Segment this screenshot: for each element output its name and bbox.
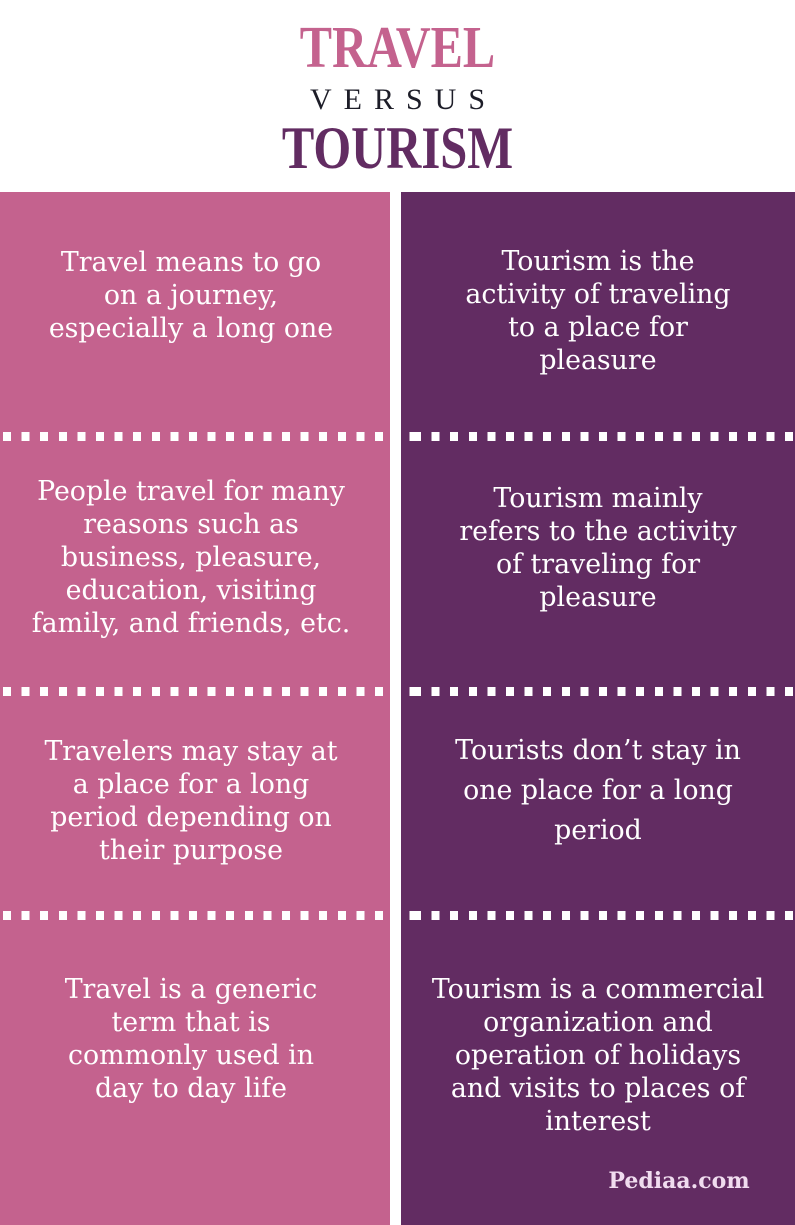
text: tourism row 4: and visits to places of	[451, 1073, 745, 1104]
text: travel row 2	[32, 476, 350, 639]
panel: tourism column	[401, 192, 795, 1225]
text: tourism row 3: Tourists don’t stay in	[455, 735, 741, 766]
logo: pediaa: Pediaa.com	[608, 1168, 750, 1194]
text: tourism row 4: organization and	[483, 1007, 713, 1038]
title: versus: VERSUS	[310, 83, 497, 116]
text: tourism row 4	[432, 974, 764, 1137]
text: travel row 2: education, visiting	[66, 575, 316, 606]
text: travel row 1	[49, 247, 333, 344]
title: travel: TRAVEL	[300, 14, 495, 80]
text: tourism row 1	[465, 246, 731, 376]
text: travel row 4: Travel is a generic	[65, 974, 317, 1005]
text: travel row 3: Travelers may stay at	[44, 736, 338, 767]
text: travel row 2: business, pleasure,	[61, 542, 321, 573]
text: tourism row 4: operation of holidays	[455, 1040, 741, 1071]
text: tourism row 3: one place for a long	[463, 775, 733, 806]
text: tourism row 1: activity of traveling	[465, 279, 731, 310]
text: travel row 4: day to day life	[95, 1073, 287, 1104]
text: travel row 4	[65, 974, 317, 1104]
text: travel row 4: term that is	[112, 1007, 270, 1038]
panel: travel column	[0, 192, 390, 1225]
text: tourism row 3: period	[554, 815, 642, 846]
text: travel row 3: period depending on	[50, 802, 332, 833]
text: travel row 3	[44, 736, 338, 866]
text: tourism row 1: pleasure	[539, 345, 657, 376]
text: travel row 1: on a journey,	[104, 280, 278, 311]
text: tourism row 2: Tourism mainly	[493, 483, 703, 514]
text: travel row 2: reasons such as	[83, 509, 299, 540]
text: travel row 4: commonly used in	[68, 1040, 314, 1071]
text: tourism row 4: interest	[545, 1106, 651, 1137]
text: travel row 2: People travel for many	[37, 476, 345, 507]
text: tourism row 3	[455, 735, 741, 846]
text: travel row 1: especially a long one	[49, 313, 333, 344]
text: travel row 3: a place for a long	[73, 769, 309, 800]
text: tourism row 1: to a place for	[508, 312, 688, 343]
text: tourism row 2: of traveling for	[496, 549, 700, 580]
text: tourism row 2: pleasure	[539, 582, 657, 613]
text: tourism row 1: Tourism is the	[502, 246, 694, 277]
text: travel row 3: their purpose	[99, 835, 283, 866]
text: tourism row 2	[459, 483, 737, 613]
text: travel row 1: Travel means to go	[61, 247, 321, 278]
text: travel row 2: family, and friends, etc.	[32, 608, 350, 639]
text: tourism row 4: Tourism is a commercial	[432, 974, 764, 1005]
title: tourism: TOURISM	[282, 115, 513, 181]
text: tourism row 2: refers to the activity	[459, 516, 737, 547]
